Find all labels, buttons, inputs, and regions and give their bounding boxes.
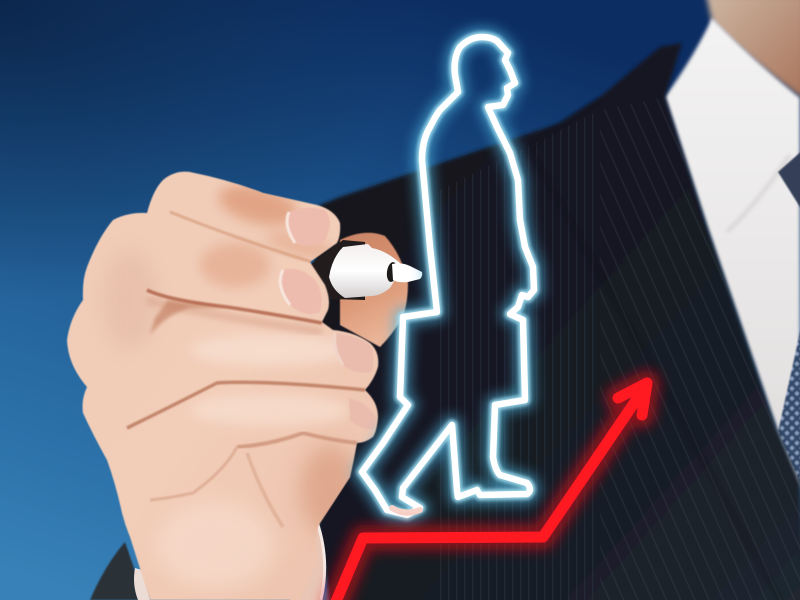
neck — [706, 0, 800, 100]
hand holding the pen — [67, 172, 378, 600]
jacket sleeve — [90, 542, 145, 600]
fingernails — [280, 208, 376, 430]
white shirt and collar — [665, 18, 800, 490]
necktie — [778, 148, 800, 495]
shirt cuffs — [134, 522, 325, 600]
red neon rising arrow — [335, 383, 647, 600]
marker pen — [306, 240, 422, 300]
dark pinstripe suit — [300, 43, 800, 600]
neon outline of walking businessman — [362, 37, 534, 515]
finger shading — [102, 178, 365, 590]
thumb behind the pen — [340, 233, 408, 347]
